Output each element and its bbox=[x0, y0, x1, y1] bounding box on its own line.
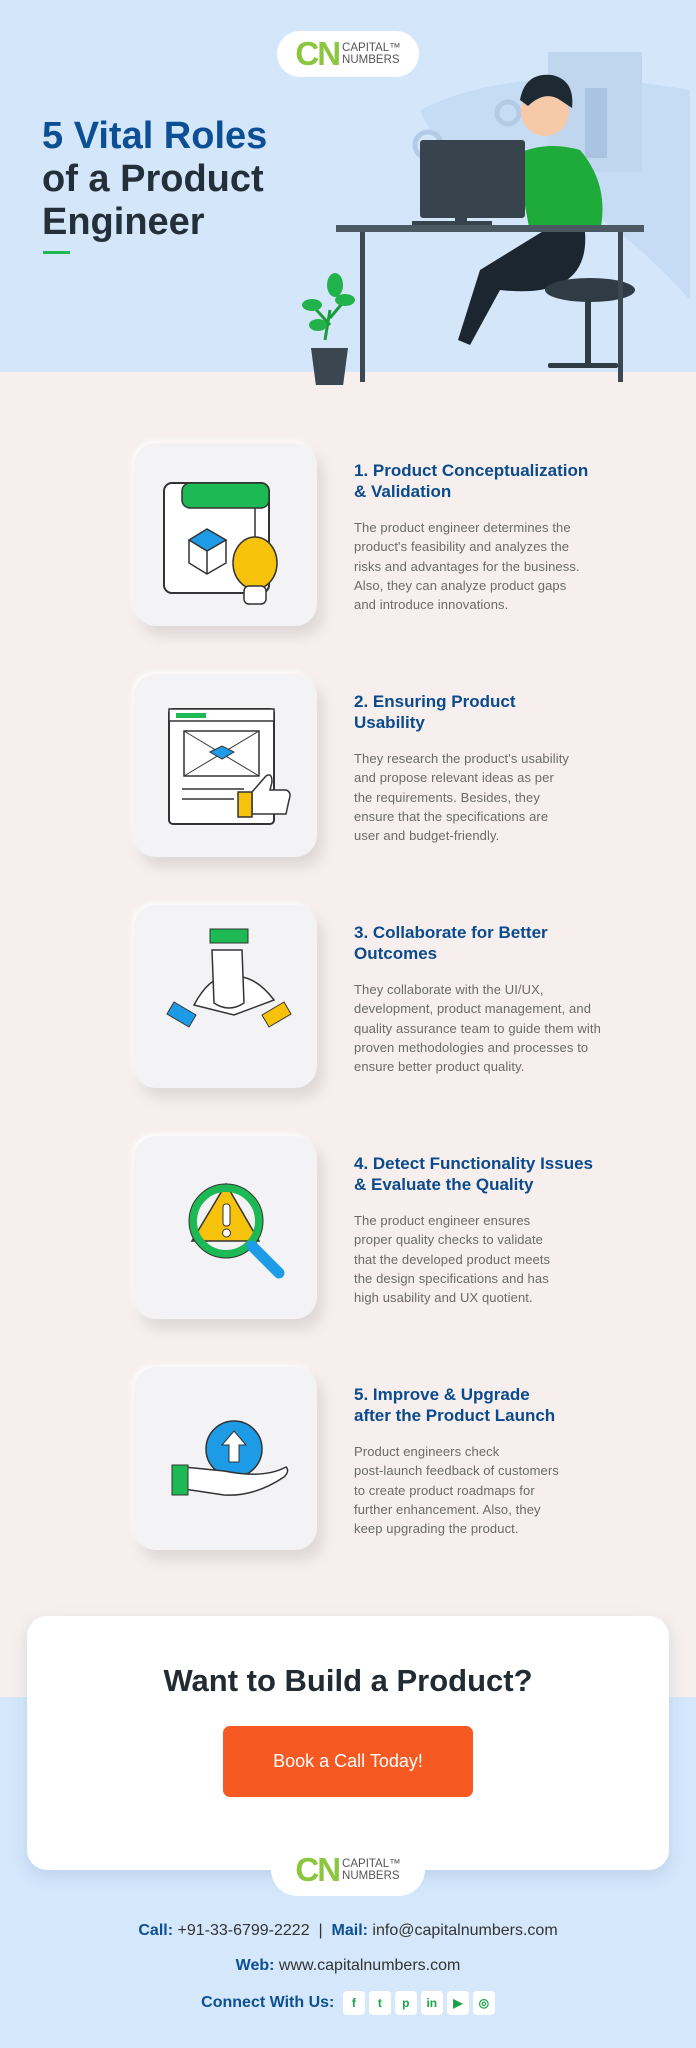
heading 3 bbox=[354, 923, 548, 963]
CTA heading: Want to Build a Product? bbox=[163, 1663, 533, 1698]
title underline bbox=[43, 251, 70, 254]
text 3: proven methodologies and processes to bbox=[354, 1040, 588, 1055]
text 5: post-launch feedback of customers bbox=[354, 1463, 559, 1478]
card 3 bbox=[132, 903, 601, 1101]
logo top bbox=[277, 31, 419, 77]
text 3: They collaborate with the UI/UX, bbox=[354, 982, 544, 997]
social links bbox=[201, 1991, 495, 2015]
web line: Web: www.capitalnumbers.com bbox=[236, 1957, 460, 1974]
CTA button: Book a Call Today! bbox=[273, 1751, 423, 1771]
CTA button bbox=[223, 1726, 473, 1797]
title bbox=[42, 115, 267, 243]
heading 1: 1. Product Conceptualization bbox=[354, 461, 588, 480]
logo top: CAPITAL™ bbox=[342, 42, 401, 54]
heading 4: 4. Detect Functionality Issues bbox=[354, 1154, 593, 1173]
text 3: development, product management, and bbox=[354, 1001, 591, 1016]
social links: ▶ bbox=[453, 1996, 462, 2010]
title: 5 Vital Roles bbox=[42, 115, 267, 157]
icon: usability thumbs up bbox=[134, 674, 317, 857]
text 5: keep upgrading the product. bbox=[354, 1521, 519, 1536]
contact line: Call: +91-33-6799-2222 | Mail: info@capitalnumbers.com bbox=[138, 1922, 558, 1939]
text 5: to create product roadmaps for bbox=[354, 1483, 535, 1498]
heading 3: Outcomes bbox=[354, 944, 437, 963]
text 2: the requirements. Besides, they bbox=[354, 790, 540, 805]
text 3 bbox=[354, 982, 601, 1074]
icon: hand with upgrade arrow bbox=[134, 1367, 317, 1550]
illustration: engineer at desk bbox=[302, 52, 690, 385]
logo bottom bbox=[271, 1843, 425, 1896]
social links: f bbox=[352, 1996, 356, 2010]
heading 5: after the Product Launch bbox=[354, 1406, 555, 1425]
card 4 bbox=[132, 1134, 593, 1332]
logo bottom: NUMBERS bbox=[342, 1870, 400, 1882]
text 4: proper quality checks to validate bbox=[354, 1232, 543, 1247]
heading 2: Usability bbox=[354, 713, 425, 732]
text 2: ensure that the specifications are bbox=[354, 809, 548, 824]
text 2: They research the product's usability bbox=[354, 751, 569, 766]
text 4: high usability and UX quotient. bbox=[354, 1290, 533, 1305]
heading 3: 3. Collaborate for Better bbox=[354, 923, 548, 942]
heading 5 bbox=[354, 1385, 555, 1425]
card 1 bbox=[132, 441, 588, 639]
social links: p bbox=[402, 1996, 409, 2010]
text 2 bbox=[354, 751, 569, 843]
text 1: risks and advantages for the business. bbox=[354, 559, 580, 574]
text 3: quality assurance team to guide them with bbox=[354, 1021, 601, 1036]
heading 5: 5. Improve & Upgrade bbox=[354, 1385, 530, 1404]
icon: lightbulb and cube bbox=[134, 443, 317, 626]
social links: in bbox=[426, 1996, 437, 2010]
logo top: NUMBERS bbox=[342, 54, 400, 66]
text 5: further enhancement. Also, they bbox=[354, 1502, 541, 1517]
text 2: and propose relevant ideas as per bbox=[354, 770, 554, 785]
text 4: that the developed product meets bbox=[354, 1252, 550, 1267]
heading 2: 2. Ensuring Product bbox=[354, 692, 516, 711]
text 4: The product engineer ensures bbox=[354, 1213, 530, 1228]
social links: Connect With Us: bbox=[201, 1994, 334, 2011]
text 1: Also, they can analyze product gaps bbox=[354, 578, 566, 593]
social links: t bbox=[378, 1996, 382, 2010]
text 1: and introduce innovations. bbox=[354, 597, 508, 612]
social links: ◎ bbox=[479, 1996, 489, 2010]
text 1: The product engineer determines the bbox=[354, 520, 571, 535]
text 1: product's feasibility and analyzes the bbox=[354, 539, 569, 554]
footer background bbox=[0, 1697, 696, 2048]
icon: collaborating hands bbox=[134, 905, 317, 1088]
header background bbox=[0, 0, 696, 372]
heading 4 bbox=[354, 1154, 593, 1194]
heading 2 bbox=[354, 692, 516, 732]
logo top: CN bbox=[295, 35, 339, 72]
text 1 bbox=[354, 520, 580, 612]
text 2: user and budget-friendly. bbox=[354, 828, 499, 843]
heading 4: & Evaluate the Quality bbox=[354, 1175, 534, 1194]
card 5 bbox=[132, 1365, 559, 1563]
heading 1: & Validation bbox=[354, 482, 451, 501]
title: of a Product bbox=[42, 158, 264, 200]
text 5 bbox=[354, 1444, 559, 1536]
text 4: the design specifications and has bbox=[354, 1271, 549, 1286]
logo bottom: CAPITAL™ bbox=[342, 1858, 401, 1870]
text 4 bbox=[354, 1213, 550, 1305]
icon: magnifier warning bbox=[134, 1136, 317, 1319]
logo bottom: CN bbox=[295, 1850, 339, 1888]
text 5: Product engineers check bbox=[354, 1444, 499, 1459]
title: Engineer bbox=[42, 201, 205, 243]
heading 1 bbox=[354, 461, 588, 501]
text 3: ensure better product quality. bbox=[354, 1059, 524, 1074]
card 2 bbox=[132, 672, 569, 870]
CTA panel bbox=[27, 1616, 669, 1870]
